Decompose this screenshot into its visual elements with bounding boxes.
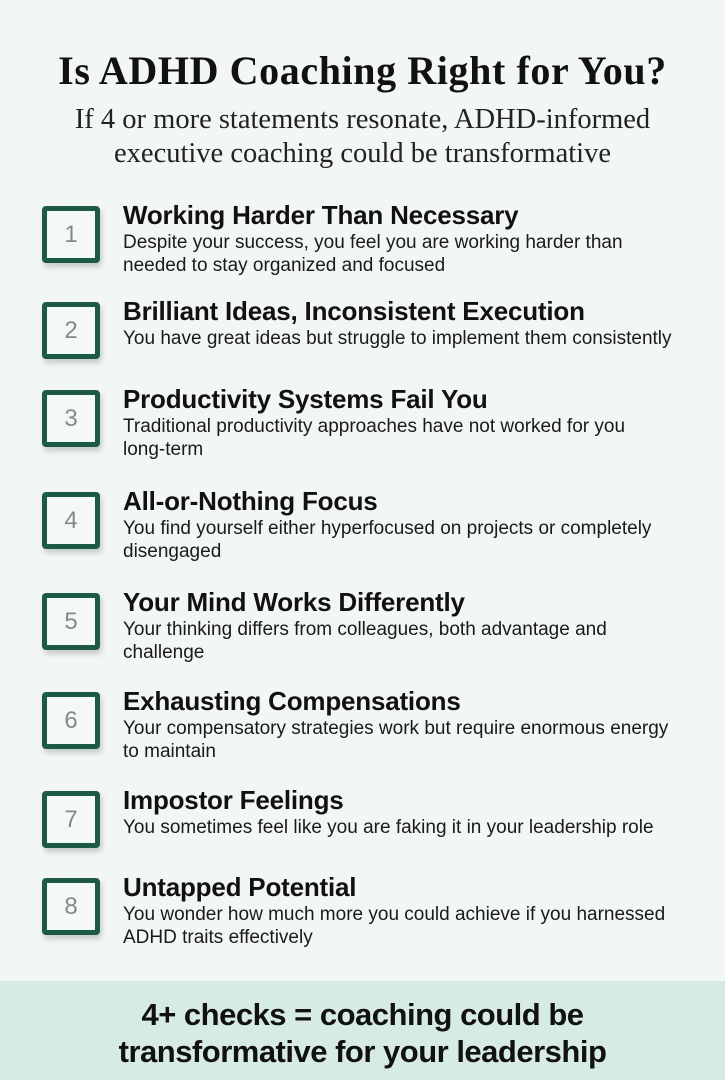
item 4 xyxy=(42,486,652,562)
item 1: needed to stay organized and focused xyxy=(123,255,445,276)
subtitle: executive coaching could be transformative xyxy=(114,138,611,169)
item 8: 8 xyxy=(64,893,78,920)
item 7: Impostor Feelings xyxy=(123,785,344,815)
item 8: ADHD traits effectively xyxy=(123,927,313,948)
item 3: 3 xyxy=(64,405,78,432)
item 5 xyxy=(42,587,607,663)
item 4: 4 xyxy=(64,507,78,534)
item 1: 1 xyxy=(64,221,78,248)
footer banner xyxy=(0,981,725,1080)
item 5: challenge xyxy=(123,642,204,663)
footer banner: 4+ checks = coaching could be xyxy=(141,997,584,1032)
item 7: 7 xyxy=(64,806,78,833)
item 6: Exhausting Compensations xyxy=(123,686,461,716)
item 5: 5 xyxy=(64,608,78,635)
item 1: Despite your success, you feel you are working harder than xyxy=(123,232,623,253)
subtitle xyxy=(75,104,650,169)
item 3: Traditional productivity approaches have not worked for you xyxy=(123,416,625,437)
subtitle: If 4 or more statements resonate, ADHD-informed xyxy=(75,104,650,135)
item 8: Untapped Potential xyxy=(123,872,356,902)
item 2: You have great ideas but struggle to implement them consistently xyxy=(123,328,672,349)
item 8: You wonder how much more you could achieve if you harnessed xyxy=(123,904,665,925)
item 7: You sometimes feel like you are faking it in your leadership role xyxy=(123,817,654,838)
item 6 xyxy=(42,686,668,762)
item 2: Brilliant Ideas, Inconsistent Execution xyxy=(123,296,585,326)
item 6: to maintain xyxy=(123,741,216,762)
item 4: All-or-Nothing Focus xyxy=(123,486,378,516)
item 3 xyxy=(42,384,625,460)
item 5: Your Mind Works Differently xyxy=(123,587,465,617)
item 7 xyxy=(42,785,654,854)
title: Is ADHD Coaching Right for You? xyxy=(58,48,667,93)
item 1: Working Harder Than Necessary xyxy=(123,200,518,230)
item 3: long-term xyxy=(123,439,203,460)
item 6: Your compensatory strategies work but require enormous energy xyxy=(123,718,668,739)
item 6: 6 xyxy=(64,707,78,734)
item 1 xyxy=(42,200,623,276)
item 4: You find yourself either hyperfocused on projects or completely xyxy=(123,518,651,539)
item 5: Your thinking differs from colleagues, both advantage and xyxy=(123,619,607,640)
item 3: Productivity Systems Fail You xyxy=(123,384,488,414)
item 8 xyxy=(42,872,665,948)
item 4: disengaged xyxy=(123,541,221,562)
item 2: 2 xyxy=(64,317,78,344)
footer banner: transformative for your leadership xyxy=(119,1034,606,1069)
item 2 xyxy=(42,296,672,366)
